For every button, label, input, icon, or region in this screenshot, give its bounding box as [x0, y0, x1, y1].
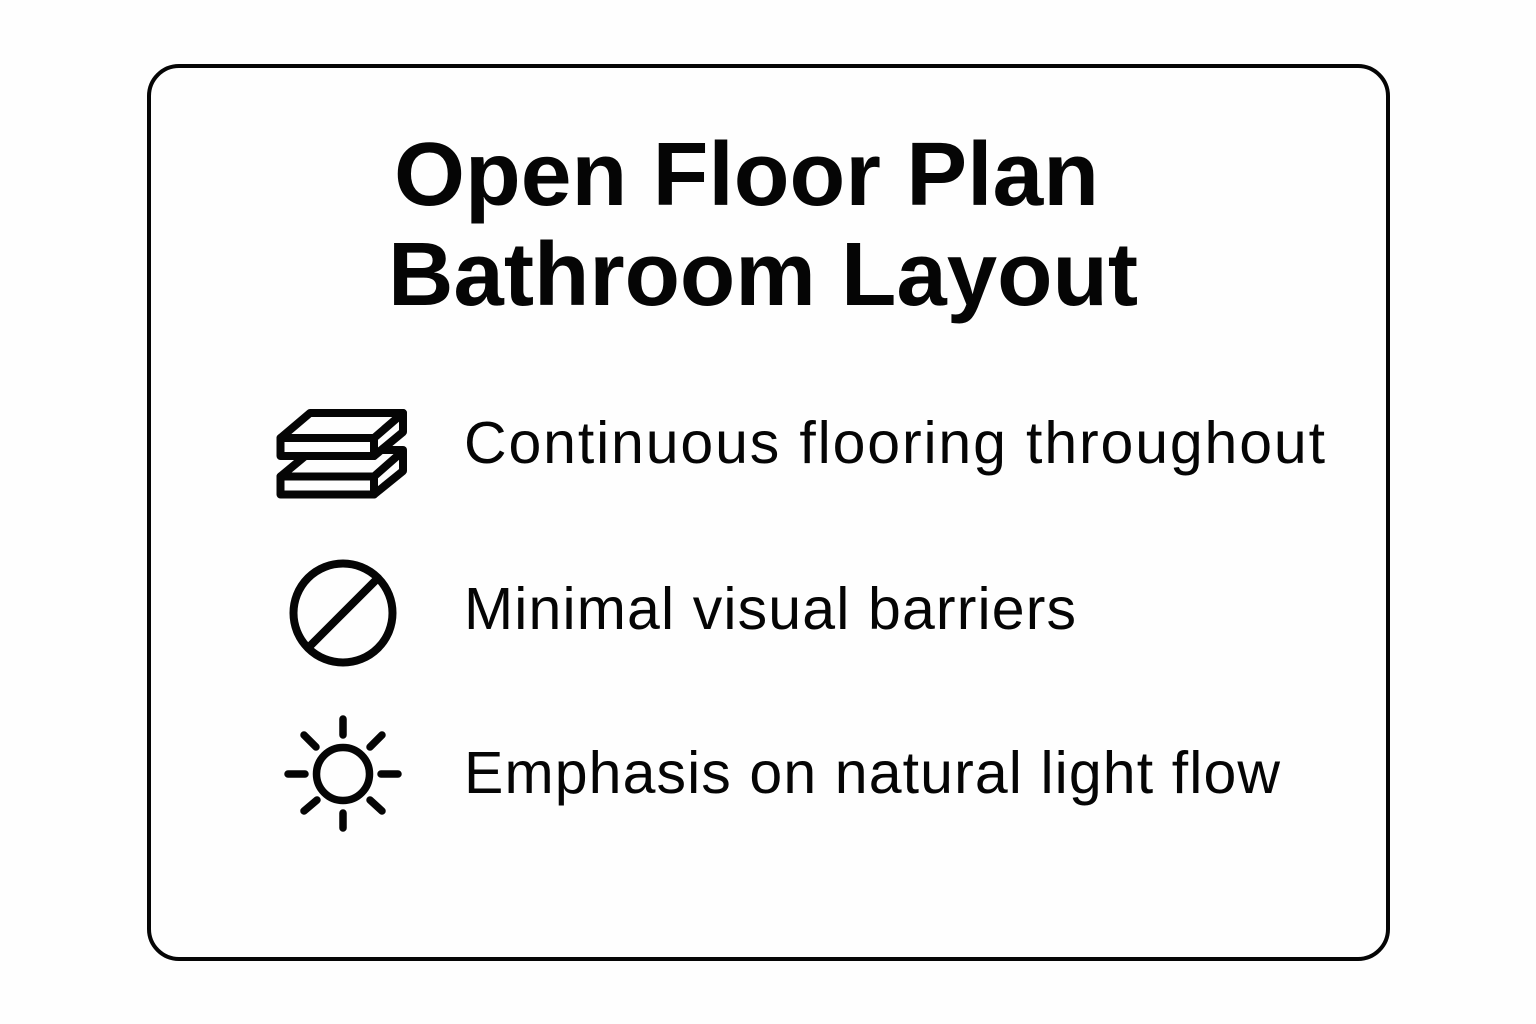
icon: stacked floor planks [280, 413, 403, 494]
icon: sun [288, 719, 398, 828]
text: minimal barriers: Minimal visual barriers [464, 576, 1076, 642]
text: continuous flooring: Continuous flooring throughout [464, 410, 1325, 476]
title: Open Floor Plan [394, 125, 1099, 225]
text: natural light: Emphasis on natural light flow [464, 740, 1280, 806]
title [388, 125, 1138, 325]
icon: prohibited circle [294, 564, 392, 662]
title: Bathroom Layout [388, 225, 1138, 325]
panel: rounded card outline [149, 66, 1388, 959]
